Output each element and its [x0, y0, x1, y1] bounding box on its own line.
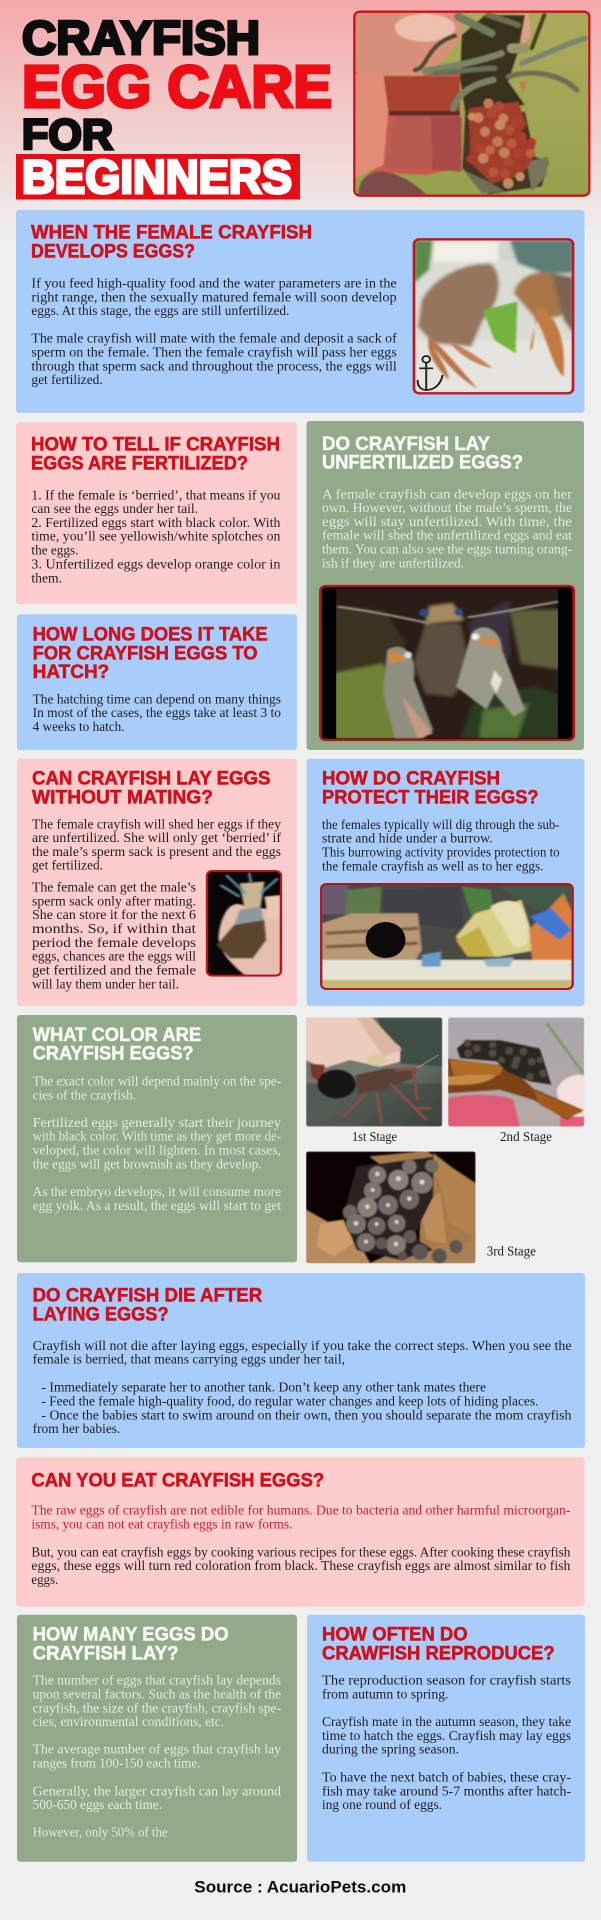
warning text: [31, 1503, 571, 1532]
body text: get fertilized.: [32, 858, 103, 873]
caption: 1st stage: 1st Stage: [352, 1129, 397, 1144]
body text: However, only 50% of the: [33, 1825, 168, 1840]
heading: HOW LONG DOES IT TAKE: [33, 625, 268, 646]
body text: 2. Fertilized eggs start with black color. With: [31, 515, 281, 530]
body text: ranges from 100-150 each time.: [33, 1756, 201, 1771]
heading: [31, 223, 312, 262]
body text: If you feed high-quality food and the water parameters are in the: [31, 275, 397, 290]
panel: do crayfish die after laying eggs: [17, 1273, 585, 1448]
body text: fish may take around 5-7 months after hatch-: [322, 1783, 572, 1798]
body text: [32, 816, 282, 991]
photo: crayfish holding a leaf: [414, 239, 573, 393]
body text: veloped, the color will lighten. In most cases,: [33, 1143, 281, 1158]
body text: 500-650 eggs each time.: [33, 1797, 162, 1812]
heading: [33, 1286, 262, 1325]
body text: To have the next batch of babies, these cray-: [322, 1769, 572, 1784]
heading: CAN CRAYFISH LAY EGGS: [32, 769, 270, 790]
body text: will lay them under her tail.: [32, 976, 179, 991]
body text: eggs, these eggs will turn red coloration from black. These crayfish eggs are almost similar to fish: [31, 1558, 571, 1573]
body text: months. So, if within that: [32, 921, 196, 936]
body text: The reproduction season for crayfish starts: [322, 1673, 571, 1688]
body text: eggs. At this stage, the eggs are still unfertilized.: [31, 303, 289, 318]
body text: own. However, without the male’s sperm, the: [322, 500, 572, 515]
body text: The number of eggs that crayfish lay depends: [33, 1673, 281, 1688]
body text: [33, 1338, 572, 1436]
body text: cies, environmental conditions, etc.: [33, 1714, 224, 1729]
warning text: isms, you can not eat crayfish eggs in raw forms.: [31, 1517, 292, 1532]
heading: EGGS ARE FERTILIZED?: [31, 453, 248, 474]
heading: PROTECT THEIR EGGS?: [322, 787, 539, 808]
body text: ish if they are unfertilized.: [322, 555, 464, 570]
body text: from autumn to spring.: [322, 1686, 448, 1701]
body text: The female crayfish will shed her eggs if they: [32, 816, 281, 831]
heading: [322, 434, 523, 474]
body text: the male’s sperm sack is present and the eggs: [32, 844, 281, 859]
panel: how long does it take for crayfish eggs to hatch: [17, 614, 297, 750]
heading: WHAT COLOR ARE: [33, 1025, 201, 1046]
body text: period the female develops: [32, 935, 196, 950]
body text: cies of the crayfish.: [33, 1087, 136, 1102]
photo: hand holding berried crayfish: [207, 871, 281, 976]
body text: Fertilized eggs generally start their journey: [33, 1115, 281, 1130]
body text: [31, 487, 281, 585]
body text: female is berried, that means carrying eggs under her tail,: [33, 1352, 345, 1367]
body text: A female crayfish can develop eggs on her: [322, 486, 573, 501]
body text: time, you’ll see yellowish/white splotches on: [31, 529, 281, 544]
heading: [33, 1025, 201, 1065]
heading: [322, 769, 539, 808]
caption: 3rd stage: 3rd Stage: [487, 1244, 536, 1259]
heading: CRAWFISH REPRODUCE?: [322, 1643, 555, 1664]
body text: In most of the cases, the eggs take at least 3 to: [33, 705, 281, 720]
panel: do crayfish lay unfertilized eggs: [307, 421, 584, 750]
photo: crayfish in dark tank: [320, 586, 574, 740]
heading: HATCH?: [33, 662, 109, 683]
body text: them.: [31, 570, 62, 585]
title: FOR: [22, 111, 113, 159]
panel: can crayfish lay eggs without mating: [17, 759, 297, 1006]
body text: from her babies.: [33, 1421, 120, 1436]
body text: [33, 1673, 281, 1840]
panel: what color are crayfish eggs: [17, 1015, 297, 1262]
body text: - Once the babies start to swim around on their own, then you should separate the mom crayfish: [41, 1407, 572, 1422]
heading: DO CRAYFISH LAY: [322, 434, 490, 455]
body text: Crayfish will not die after laying eggs, especially if you take the correct steps. When you see the: [33, 1338, 572, 1353]
body text: are unfertilized. She will only get ‘berried’ if: [32, 830, 282, 845]
heading: LAYING EGGS?: [33, 1304, 169, 1325]
panel: how to tell if crayfish eggs are fertilized: [16, 422, 297, 604]
body text: [31, 275, 397, 387]
body text: [322, 486, 573, 570]
body text: [31, 1544, 571, 1587]
heading: [322, 1625, 555, 1664]
body text: The female can get the male’s: [32, 879, 196, 894]
heading: [32, 769, 270, 808]
body text: The male crayfish will mate with the female and deposit a sack of: [31, 331, 397, 346]
body text: the eggs will get brownish as they develop.: [33, 1156, 262, 1171]
body text: the females typically will dig through the sub-: [322, 817, 560, 832]
heading: DEVELOPS EGGS?: [31, 241, 195, 262]
body text: eggs will stay unfertilized. With time, the: [322, 514, 572, 529]
caption: 2nd stage: 2nd Stage: [500, 1129, 552, 1144]
body text: right range, then the sexually matured female will soon develop: [31, 289, 397, 304]
egg cluster: [466, 98, 536, 189]
body text: can see the eggs under her tail.: [31, 501, 198, 516]
source line: Source : AcuarioPets.com: [194, 1878, 406, 1897]
heading: WITHOUT MATING?: [32, 787, 213, 808]
heading: FOR CRAYFISH EGGS TO: [33, 643, 258, 664]
body text: the female crayfish as well as to her eggs.: [322, 858, 544, 873]
body text: - Immediately separate her to another tank. Don’t keep any other tank mates there: [41, 1380, 486, 1395]
body text: The hatching time can depend on many things: [33, 691, 281, 706]
body text: [322, 1673, 572, 1812]
body text: She can store it for the next 6: [32, 907, 196, 922]
title: [16, 11, 332, 203]
heading: HOW DO CRAYFISH: [322, 769, 500, 790]
body text: during the spring season.: [322, 1742, 459, 1757]
heading: [33, 625, 268, 683]
body text: sperm on the female. Then the female crayfish will pass her eggs: [31, 345, 397, 360]
body text: with black color. With time as they get more de-: [33, 1129, 281, 1144]
body text: 1. If the female is ‘berried’, that means if you: [31, 487, 281, 502]
heading: DO CRAYFISH DIE AFTER: [33, 1286, 262, 1307]
photo: aquarium with log burrow: [321, 884, 573, 989]
panel: how do crayfish protect their eggs: [307, 759, 584, 1006]
body text: eggs, chances are the eggs will: [32, 949, 196, 964]
panel: how many eggs do crayfish lay: [17, 1615, 297, 1862]
body text: female will shed the unfertilized eggs and eat: [322, 528, 572, 543]
body text: The average number of eggs that crayfish lay: [33, 1742, 281, 1757]
body text: 4 weeks to hatch.: [33, 719, 125, 734]
photo: 3rd stage eggs: [306, 1151, 476, 1263]
body text: - Feed the female high-quality food, do regular water changes and keep lots of hiding places.: [41, 1393, 538, 1408]
heading: CRAYFISH LAY?: [33, 1643, 179, 1664]
body text: ing one round of eggs.: [322, 1797, 442, 1812]
heading: [31, 435, 280, 474]
body text: [322, 817, 560, 873]
body text: crayfish, the size of the crayfish, crayfish spe-: [33, 1700, 281, 1715]
body text: egg yolk. As a result, the eggs will start to get: [33, 1198, 281, 1213]
body text: time to hatch the eggs. Crayfish may lay eggs: [322, 1728, 571, 1743]
heading: CRAYFISH EGGS?: [33, 1044, 194, 1065]
title: BEGINNERS: [22, 150, 292, 203]
heading: CAN YOU EAT CRAYFISH EGGS?: [31, 1471, 324, 1492]
title: CRAYFISH: [22, 11, 260, 64]
heading: HOW OFTEN DO: [322, 1625, 468, 1646]
heading: HOW MANY EGGS DO: [33, 1625, 229, 1646]
body text: Generally, the larger crayfish can lay around: [33, 1783, 281, 1798]
photo: 1st stage eggs: [306, 1017, 442, 1127]
body text: Crayfish mate in the autumn season, they take: [322, 1714, 571, 1729]
body text: This burrowing activity provides protection to: [322, 845, 560, 860]
body text: 3. Unfertilized eggs develop orange color in: [31, 556, 281, 571]
body text: As the embryo develops, it will consume more: [33, 1184, 281, 1199]
heading: WHEN THE FEMALE CRAYFISH: [31, 223, 312, 244]
body text: get fertilized and the female: [32, 963, 196, 978]
icon: anchor: [418, 356, 443, 390]
body text: [33, 1073, 281, 1213]
body text: But, you can eat crayfish eggs by cooking various recipes for these eggs. After cooking these crayfish: [31, 1544, 571, 1559]
body text: get fertilized.: [31, 372, 103, 387]
heading: UNFERTILIZED EGGS?: [322, 453, 523, 474]
body text: strate and hide under a burrow.: [322, 831, 493, 846]
body text: eggs.: [31, 1572, 58, 1587]
photo: crayfish with eggs held in hand: [354, 12, 589, 196]
body text: [33, 691, 281, 734]
body text: the eggs.: [31, 543, 78, 558]
heading: HOW TO TELL IF CRAYFISH: [31, 435, 280, 456]
body text: sperm sack only after mating.: [32, 893, 196, 908]
heading: [33, 1625, 229, 1664]
panel: can you eat crayfish eggs: [16, 1457, 584, 1607]
body text: The exact color will depend mainly on the spe-: [33, 1073, 281, 1088]
body text: upon several factors. Such as the health of the: [33, 1686, 281, 1701]
body text: through that sperm sack and throughout the process, the eggs will: [31, 358, 397, 373]
panel: when the female crayfish develops eggs: [16, 210, 584, 413]
title: EGG CARE: [22, 54, 332, 120]
warning text: The raw eggs of crayfish are not edible for humans. Due to bacteria and other harmful microorgan-: [31, 1503, 571, 1518]
panel: how often do crawfish reproduce: [307, 1615, 585, 1862]
photo: 2nd stage eggs: [448, 1017, 584, 1127]
body text: them. You can also see the eggs turning orang-: [322, 541, 572, 556]
